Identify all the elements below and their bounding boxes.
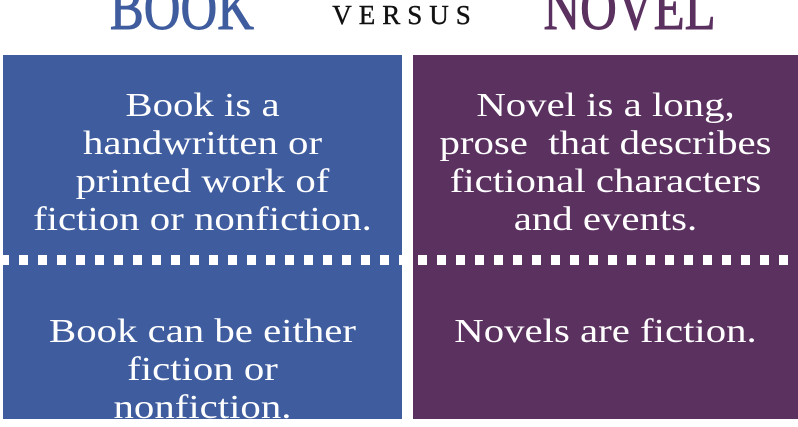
text: novel definition: Novel is a long,	[476, 87, 735, 124]
panel: book	[3, 55, 402, 419]
title: VERSUS: VERSUS	[332, 0, 478, 30]
text: book definition: fiction or nonfiction.	[33, 201, 372, 238]
text: book fiction	[49, 313, 356, 426]
text: book fiction: fiction or	[127, 351, 278, 388]
text: book fiction: nonfiction.	[114, 389, 291, 426]
text: book definition: Book is a	[125, 87, 280, 124]
text: novel definition	[440, 87, 771, 238]
text: novel definition: fictional characters	[450, 163, 761, 200]
panel: novel	[413, 55, 798, 419]
text: novel fiction: Novels are fiction.	[454, 313, 757, 350]
text: book fiction: Book can be either	[49, 313, 356, 350]
text: book definition: printed work of	[76, 163, 329, 200]
text: book definition: handwritten or	[83, 125, 322, 162]
text: novel definition: and events.	[514, 201, 697, 238]
text: novel definition: prose that describes	[440, 125, 771, 162]
text: book definition	[33, 87, 372, 238]
